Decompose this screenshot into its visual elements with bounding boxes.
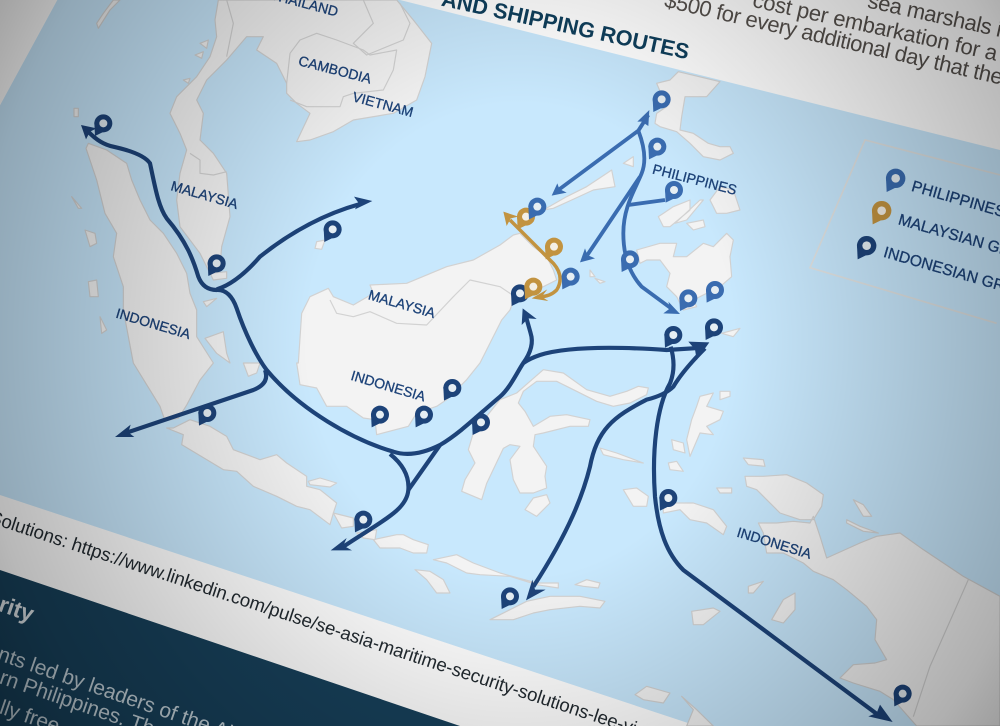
route: Philippine groups bbox=[552, 110, 680, 314]
country borders bbox=[190, 0, 968, 717]
land: Java bbox=[167, 420, 337, 525]
panel: dark security panel bbox=[0, 541, 460, 726]
label: Indonesia Sumatra: INDONESIA bbox=[114, 305, 193, 342]
legend icon: Philippine bbox=[886, 169, 905, 192]
land: New Guinea bbox=[745, 475, 1000, 726]
land: small western islands bbox=[72, 0, 740, 376]
arrowheads: Indonesian groups bbox=[81, 125, 893, 722]
route: Indonesian groups main route bbox=[88, 132, 880, 716]
label: Philippines: PHILIPPINES bbox=[651, 161, 739, 198]
map labels bbox=[114, 0, 814, 562]
label: Indonesia Papua: INDONESIA bbox=[735, 524, 814, 562]
land: Maluku and other islands bbox=[525, 391, 878, 726]
route: Malaysian groups bbox=[503, 212, 560, 301]
label: Vietnam: VIETNAM bbox=[351, 88, 415, 120]
land: Borneo bbox=[297, 233, 557, 435]
land: Sulawesi bbox=[462, 370, 648, 500]
land: Lesser Sunda islands bbox=[308, 478, 605, 620]
label: Indonesia Borneo: INDONESIA bbox=[349, 367, 428, 405]
land: Visayas bbox=[658, 187, 740, 230]
land: Palawan bbox=[543, 170, 615, 210]
pin: Palawan Philippine group bbox=[528, 198, 546, 219]
pins: Philippine groups bbox=[562, 90, 724, 311]
land: Indochina and Malay peninsula bbox=[170, 0, 432, 273]
legend icon: Indonesian bbox=[857, 236, 876, 259]
land: Luzon bbox=[655, 72, 733, 160]
land: Sumatra bbox=[86, 143, 213, 421]
land: Mindanao bbox=[637, 233, 733, 310]
pin: Sabah Malaysian group bbox=[524, 278, 542, 299]
label: Malaysia peninsula: MALAYSIA bbox=[169, 178, 241, 212]
legend bbox=[857, 169, 1000, 307]
pins: Malaysian groups bbox=[517, 208, 563, 259]
legend box bbox=[810, 140, 1000, 323]
label: Malaysia Borneo: MALAYSIA bbox=[367, 287, 438, 321]
label: Cambodia: CAMBODIA bbox=[297, 52, 374, 87]
legend icon: Malaysian bbox=[872, 201, 891, 224]
pins: Indonesian groups bbox=[94, 114, 912, 706]
